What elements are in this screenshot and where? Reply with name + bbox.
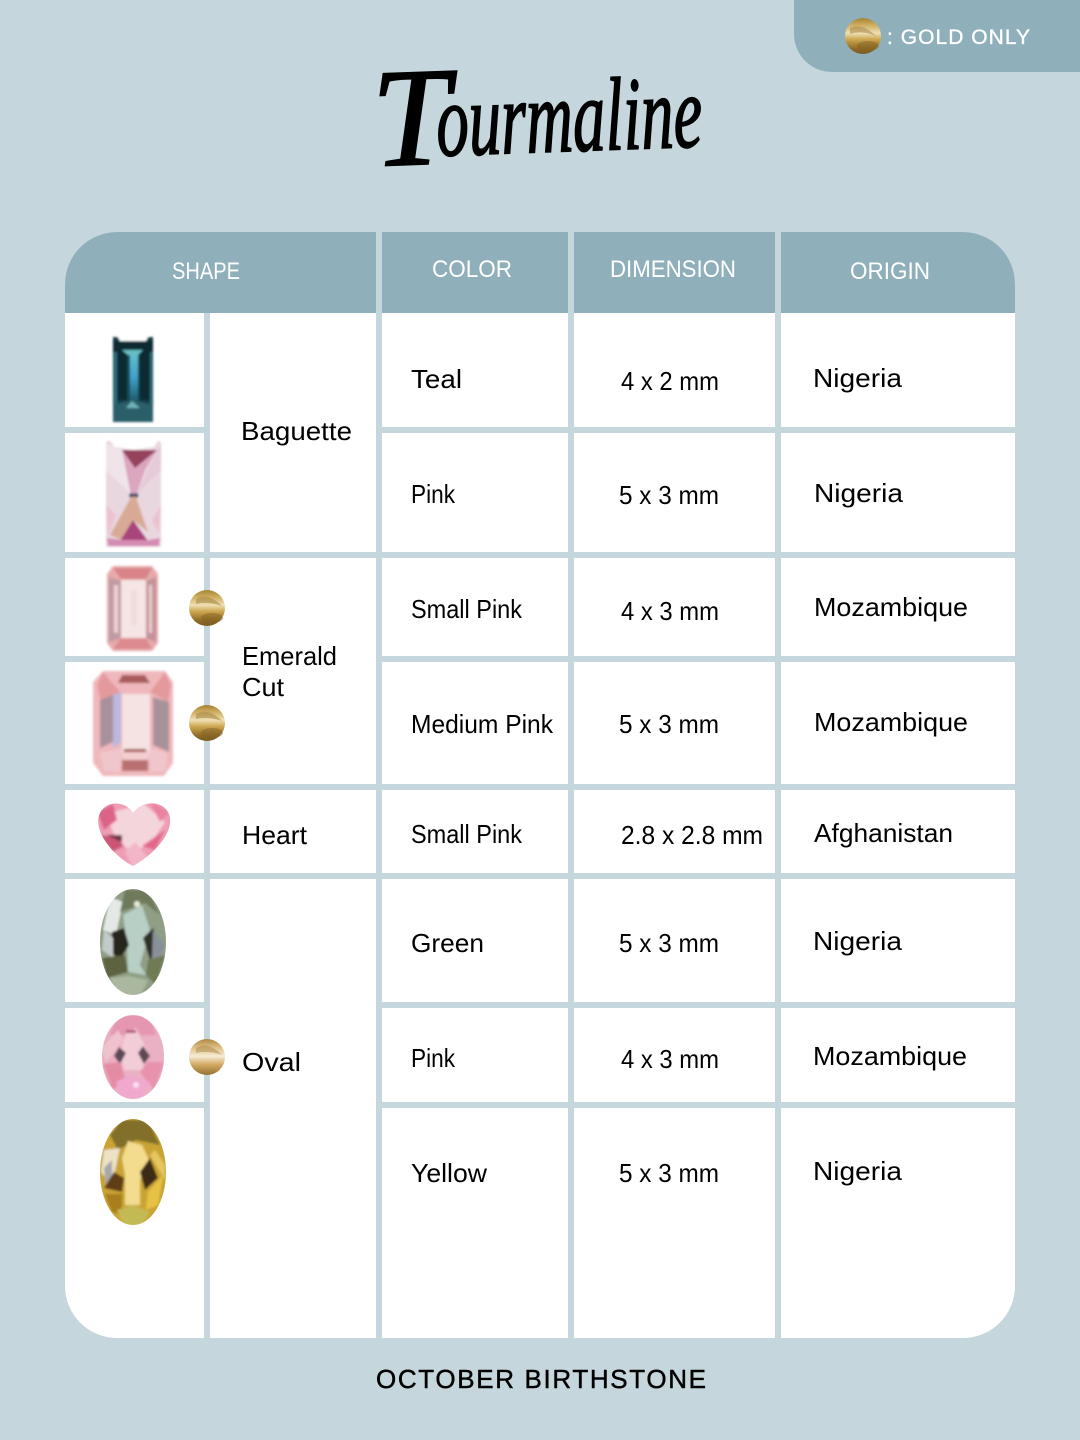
origin column: Mozambique: [813, 1041, 967, 1071]
dimension column: 5 x 3 mm: [619, 928, 719, 958]
dimension column: 4 x 3 mm: [621, 1044, 719, 1074]
gold dot: small emerald cut: [189, 590, 225, 626]
dimension column: 2.8 x 2.8 mm: [621, 820, 763, 850]
origin column: Nigeria: [813, 1156, 903, 1186]
header labels: [172, 256, 930, 285]
origin column: Afghanistan: [814, 818, 953, 848]
gem: teal baguette: [113, 335, 153, 422]
gold dot: medium emerald cut: [189, 705, 225, 741]
color column: Teal: [411, 364, 462, 394]
gem: yellow oval: [98, 1117, 168, 1227]
color column: Small Pink: [411, 819, 523, 849]
color column: Pink: [411, 1043, 456, 1073]
origin column: Nigeria: [814, 478, 904, 508]
title: T: [369, 39, 462, 197]
legend text: : GOLD ONLY: [887, 26, 1030, 49]
dimension column: [619, 366, 763, 1188]
color column: Green: [411, 928, 484, 958]
gem: small emerald cut: [107, 566, 158, 651]
color column: Pink: [411, 479, 456, 509]
gold dot: pink oval: [189, 1039, 225, 1075]
shape labels: Heart: [242, 820, 308, 850]
gem: green oval: [98, 887, 168, 997]
shape labels: [241, 416, 352, 1077]
origin column: Mozambique: [814, 707, 968, 737]
dimension column: 5 x 3 mm: [619, 709, 719, 739]
origin column: Nigeria: [813, 926, 903, 956]
shape labels: Cut: [242, 672, 285, 702]
gem: pink oval: [100, 1014, 166, 1100]
shape labels: Baguette: [241, 416, 352, 446]
color column: Small Pink: [411, 594, 523, 624]
header labels: DIMENSION: [610, 256, 736, 283]
title: ourmaline: [434, 54, 704, 179]
gem: heart: [98, 803, 170, 866]
origin column: Mozambique: [814, 592, 968, 622]
dimension column: 5 x 3 mm: [619, 480, 719, 510]
shape labels: Emerald: [242, 641, 337, 671]
color column: [411, 364, 554, 1188]
origin column: Nigeria: [813, 363, 903, 393]
footer: OCTOBER BIRTHSTONE: [376, 1364, 706, 1394]
gem: pink baguette: [106, 440, 161, 547]
header labels: COLOR: [432, 256, 512, 283]
origin column: [813, 363, 968, 1186]
dimension column: 4 x 3 mm: [621, 596, 719, 626]
gem: medium emerald cut: [93, 671, 173, 776]
table header band: [65, 232, 1015, 313]
shape labels: Oval: [242, 1047, 301, 1077]
icon: gold dot legend: [845, 18, 881, 54]
color column: Yellow: [411, 1158, 487, 1188]
table: [65, 232, 1015, 1338]
dimension column: 5 x 3 mm: [619, 1158, 719, 1188]
header labels: ORIGIN: [850, 258, 930, 285]
color column: Medium Pink: [411, 709, 554, 739]
legend tag: gold only: [794, 0, 1080, 72]
dimension column: 4 x 2 mm: [621, 366, 719, 396]
header labels: SHAPE: [172, 258, 240, 285]
